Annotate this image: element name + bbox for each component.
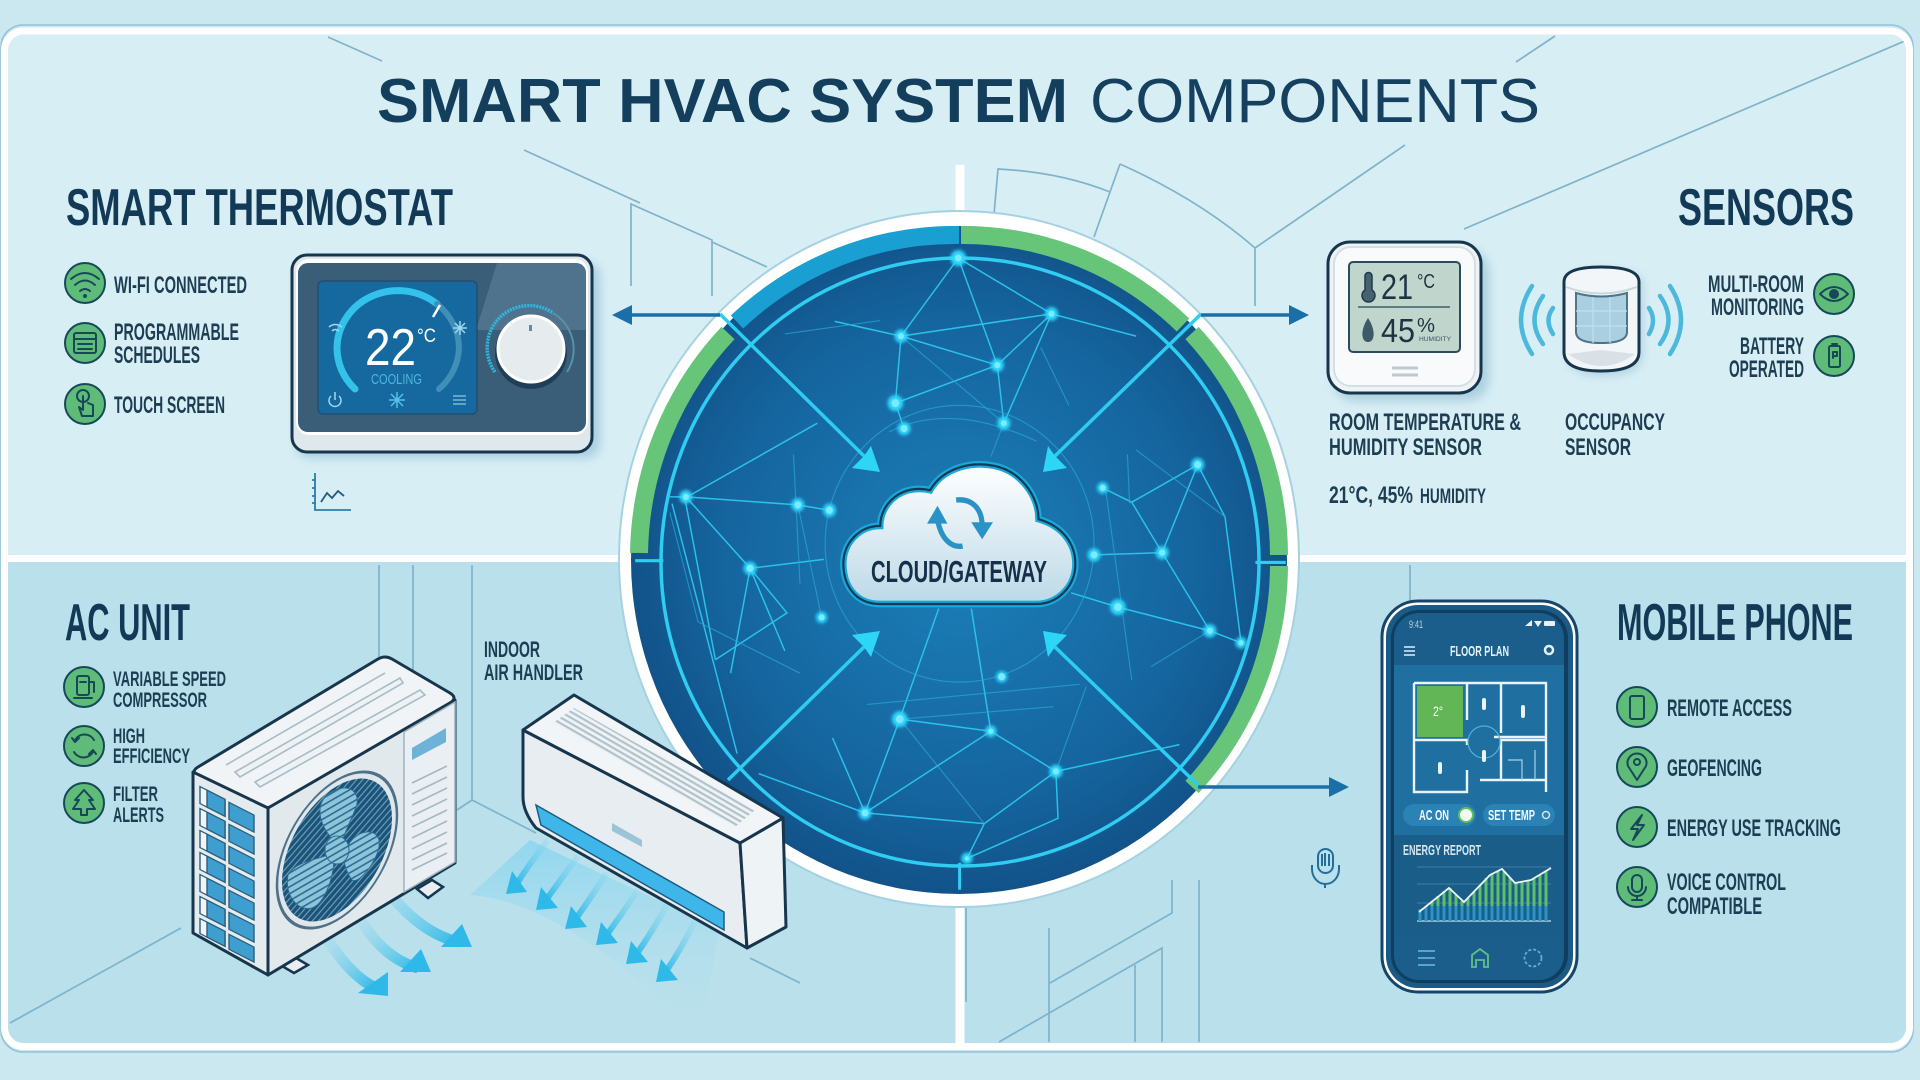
feature: touch screen	[65, 384, 225, 424]
label: indoor air handler: AIR HANDLER	[484, 660, 583, 685]
heading: ac unit: AC UNIT	[65, 594, 190, 652]
feature: voice control compatible	[1617, 867, 1786, 920]
network lines	[635, 250, 1286, 890]
indoor air handler	[523, 695, 786, 948]
feature: wi-fi connected	[65, 263, 247, 303]
heading: smart thermostat: SMART THERMOSTAT	[66, 179, 453, 237]
central network hub	[619, 211, 1299, 907]
indoor airflow haze	[470, 840, 720, 1030]
condenser fan	[277, 745, 397, 955]
feature: filter alerts: FILTER	[113, 783, 158, 806]
outdoor unit airflow	[328, 885, 472, 996]
condenser side face	[193, 772, 268, 975]
label: indoor air handler	[484, 637, 583, 685]
phone status bar	[1409, 619, 1555, 631]
horizontal divider	[8, 555, 1908, 562]
feature: variable speed compressor: COMPRESSOR	[113, 689, 207, 712]
handler top face	[523, 695, 783, 843]
feature: multi-room monitoring: MONITORING	[1711, 294, 1804, 321]
feature: programmable schedules: SCHEDULES	[114, 342, 200, 369]
feature: battery operated	[1729, 333, 1854, 383]
indoor airflow arrows	[506, 840, 695, 982]
thermostat dial	[487, 306, 574, 389]
feature: geofencing	[1617, 747, 1762, 787]
vertical divider	[956, 165, 964, 1045]
sensor display: %	[1417, 315, 1435, 337]
condenser front face	[268, 700, 455, 975]
feature: high efficiency: HIGH	[113, 725, 145, 748]
phone buttons: AC ON	[1419, 807, 1449, 824]
feature: programmable schedules	[65, 319, 239, 369]
hub cyan ring	[661, 258, 1259, 866]
arrow: AC unit link	[728, 631, 880, 780]
phone buttons	[1403, 804, 1555, 826]
temperature humidity sensor	[1328, 242, 1489, 401]
panel: smart thermostat	[65, 179, 600, 510]
sensor display: °C	[1417, 271, 1435, 293]
network nodes	[683, 254, 1244, 861]
sensor labels: HUMIDITY	[1420, 485, 1486, 508]
panel: mobile phone	[1312, 594, 1853, 992]
handler vent	[536, 805, 724, 930]
phone header	[1404, 643, 1553, 660]
label: indoor air handler: INDOOR	[484, 637, 540, 662]
thermostat device	[292, 255, 600, 458]
phone buttons: SET TEMP	[1488, 807, 1535, 824]
thermostat screen: COOLING	[371, 371, 422, 388]
phone status bar: 9:41	[1409, 619, 1423, 631]
arrow: phone link	[1043, 631, 1349, 797]
sensor labels: 21°C, 45%	[1329, 482, 1413, 509]
panel: sensors	[1328, 179, 1854, 509]
feature: multi-room monitoring	[1708, 271, 1854, 321]
feature: touch screen: TOUCH SCREEN	[114, 392, 225, 419]
feature: voice control compatible: VOICE CONTROL	[1667, 869, 1786, 896]
thermostat screen: °C	[417, 326, 436, 347]
feature: geofencing: GEOFENCING	[1667, 755, 1762, 782]
cloud edge	[843, 464, 1075, 604]
handler side face	[740, 818, 786, 948]
arrows from cloud to devices	[612, 305, 1349, 797]
energy report chart: ENERGY REPORT	[1403, 842, 1481, 859]
sync arrows	[927, 500, 993, 546]
cloud label: CLOUD/GATEWAY	[871, 554, 1047, 589]
sensor display: 45	[1381, 312, 1415, 349]
feature: energy use tracking	[1617, 807, 1841, 847]
handler front face	[523, 730, 747, 948]
microphone icon	[1312, 849, 1339, 888]
hub white ring	[619, 211, 1299, 907]
floor plan: 2°	[1433, 703, 1443, 719]
arrow: thermostat link	[612, 305, 880, 472]
sensor labels: ROOM TEMPERATURE &	[1329, 409, 1521, 436]
feature: high efficiency: EFFICIENCY	[113, 745, 190, 768]
outdoor condenser unit	[193, 657, 455, 975]
feature: multi-room monitoring: MULTI-ROOM	[1708, 271, 1804, 298]
feature: remote access: REMOTE ACCESS	[1667, 695, 1792, 722]
feature: programmable schedules: PROGRAMMABLE	[114, 319, 239, 346]
feature: high efficiency	[64, 725, 190, 768]
sensor labels: SENSOR	[1565, 434, 1631, 461]
panel: ac unit	[64, 594, 786, 1030]
condenser feet	[282, 880, 443, 973]
phone navigation	[1418, 949, 1542, 967]
phone header: FLOOR PLAN	[1450, 643, 1509, 660]
sensor labels: OCCUPANCY	[1565, 409, 1665, 436]
energy report chart	[1403, 842, 1551, 921]
floor plan	[1414, 683, 1546, 792]
title	[377, 67, 1540, 136]
feature: wi-fi connected: WI-FI CONNECTED	[114, 272, 247, 299]
thermostat screen	[318, 281, 477, 414]
feature: filter alerts	[64, 783, 164, 827]
feature: remote access	[1617, 687, 1792, 727]
feature: variable speed compressor	[64, 667, 226, 712]
network node glow	[679, 250, 1247, 864]
hub status band	[639, 235, 1279, 787]
title: SMART HVAC SYSTEM	[377, 67, 1068, 136]
small chart icon	[312, 473, 351, 510]
smartphone	[1382, 601, 1577, 992]
sensor labels: HUMIDITY SENSOR	[1329, 434, 1482, 461]
panel: bottom area background	[6, 558, 1908, 1044]
occupancy signal waves	[1521, 286, 1681, 354]
sensor display: 21	[1381, 268, 1413, 307]
title: COMPONENTS	[1090, 67, 1540, 136]
arrow: sensors link	[1043, 305, 1309, 472]
feature: battery operated: BATTERY	[1740, 333, 1804, 360]
sensor display: HUMIDITY	[1419, 336, 1452, 343]
feature: variable speed compressor: VARIABLE SPEED	[113, 668, 226, 691]
feature: voice control compatible: COMPATIBLE	[1667, 893, 1762, 920]
occupancy sensor	[1521, 267, 1681, 375]
hub disc	[631, 226, 1287, 894]
panel: top area background	[6, 32, 1908, 558]
cloud	[843, 464, 1075, 604]
sensor display	[1349, 262, 1460, 352]
condenser top face	[194, 657, 454, 808]
sensor labels	[1329, 409, 1665, 509]
feature: battery operated: OPERATED	[1729, 356, 1804, 383]
thermostat screen: 22	[365, 319, 416, 377]
feature: filter alerts: ALERTS	[113, 804, 164, 827]
